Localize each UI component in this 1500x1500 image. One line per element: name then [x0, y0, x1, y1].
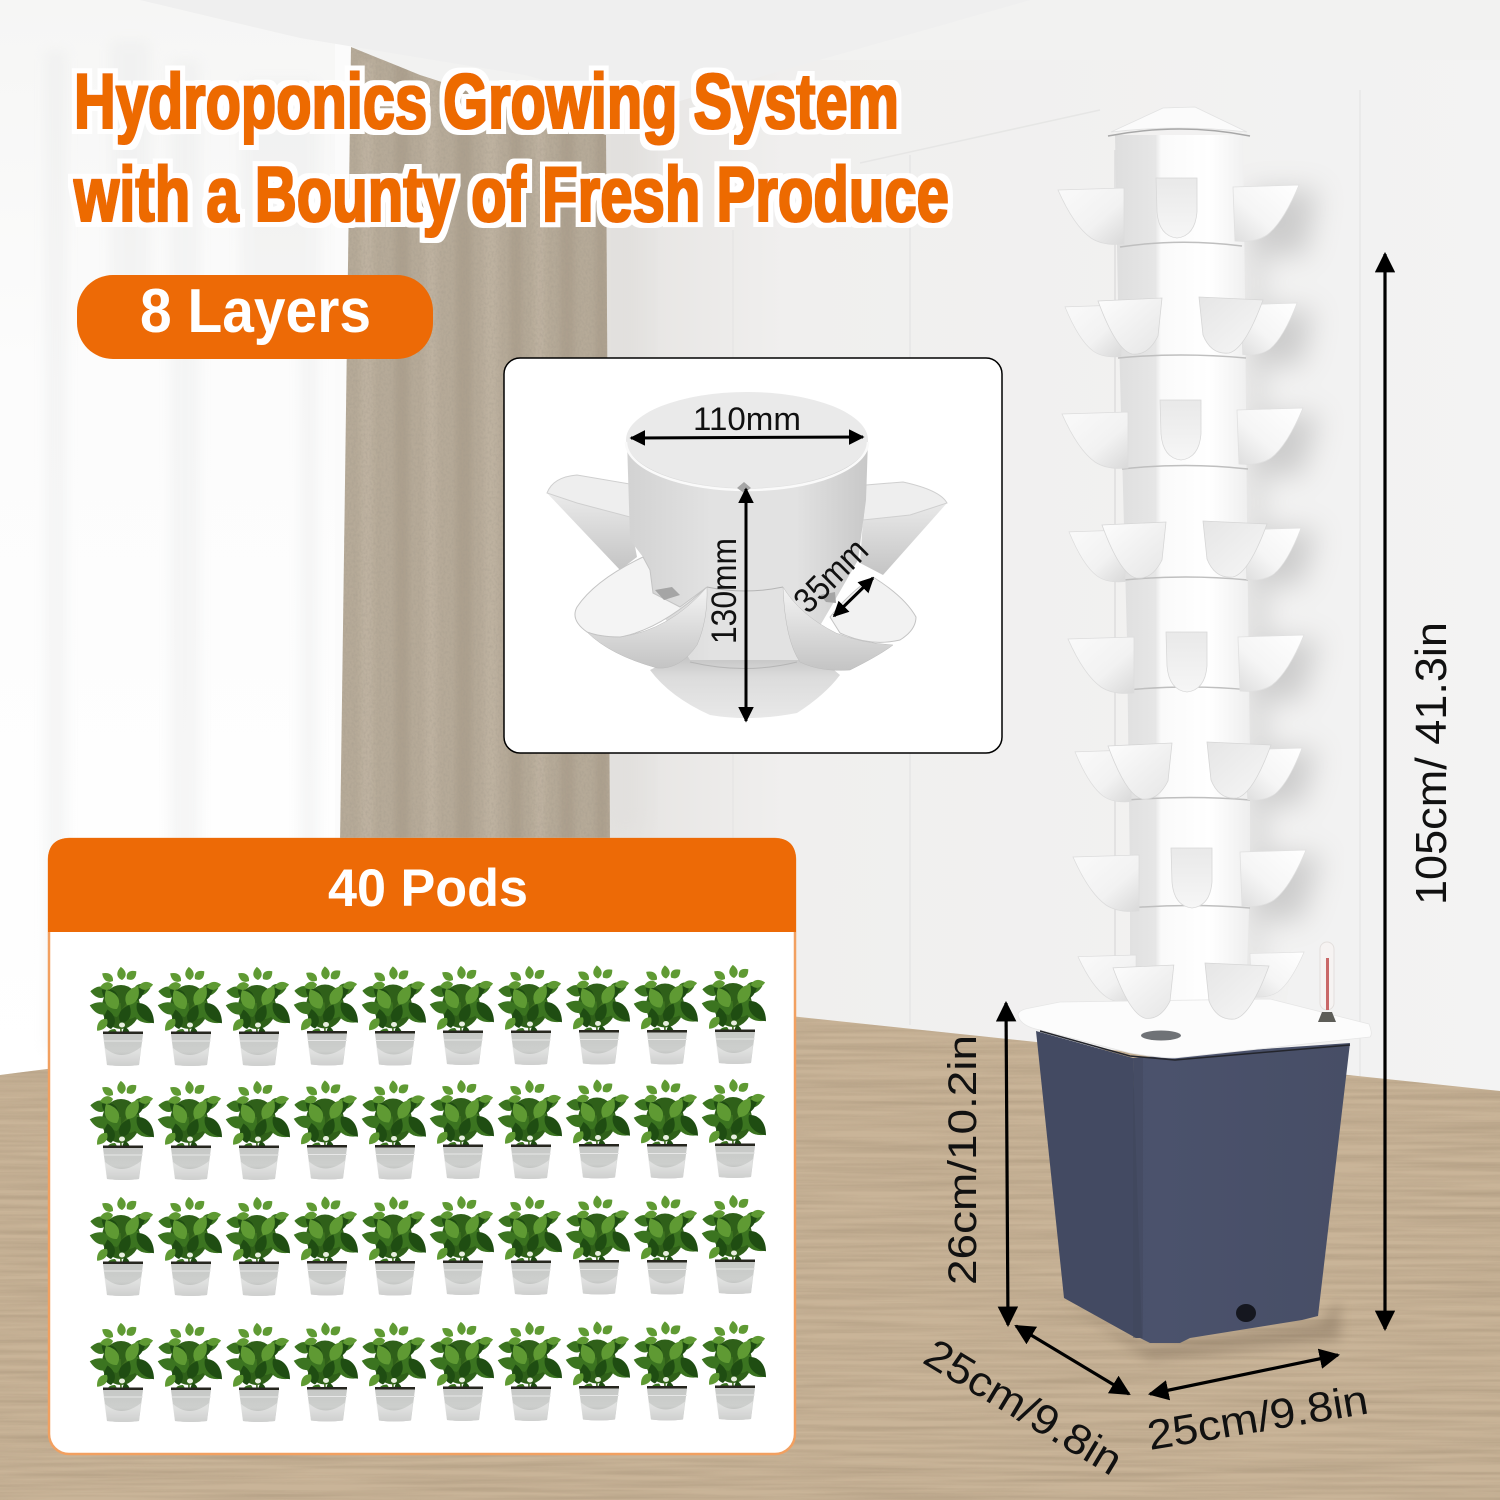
drain hole [1236, 1304, 1256, 1322]
layer 2 pods [1065, 297, 1297, 357]
tower: stacked planter column [1058, 107, 1306, 1003]
dimension: 130mm: 130mm [705, 538, 744, 644]
title: with a Bounty of Fresh Produce [73, 150, 949, 238]
window sheer curtain [0, 0, 353, 1090]
wood floor [0, 990, 1500, 1500]
layer 7 pods [1073, 848, 1306, 911]
thermometer [1318, 942, 1336, 1022]
title [73, 57, 949, 238]
tub right face [1133, 1043, 1350, 1343]
bottom dome [650, 650, 840, 718]
title: Hydroponics Growing System [74, 57, 899, 145]
reservoir base [1018, 942, 1371, 1360]
dimension: 110mm: 110mm [693, 401, 801, 437]
front left pod [575, 557, 707, 668]
layers badge [77, 275, 433, 359]
wall [606, 60, 1500, 1100]
back left pod [547, 475, 637, 570]
dimension: base width: 25cm/9.8in [1144, 1376, 1371, 1459]
dimension: overall height: 105cm/ 41.3in [1407, 622, 1456, 905]
layer 3 pods [1062, 400, 1303, 468]
panel: single layer dimensions [504, 358, 1002, 753]
column [1115, 135, 1250, 1000]
curtain [340, 40, 610, 850]
back right pod [860, 482, 947, 575]
dimension: base depth: 25cm/9.8in [916, 1329, 1131, 1484]
tower cap [1108, 107, 1250, 136]
layer 1 pods [1058, 178, 1299, 244]
panel heading: 40 Pods [328, 859, 528, 918]
layer 6 pods [1075, 742, 1302, 802]
panel: 40 pods [48, 838, 796, 1454]
plant grid [88, 964, 771, 1422]
front right pod [783, 577, 916, 670]
layers badge: 8 Layers [140, 277, 371, 346]
dimension: 35mm: 35mm [786, 531, 876, 621]
illustration: planter layer [547, 392, 947, 718]
tower shadow on wall [1250, 190, 1322, 1000]
ceiling [0, 0, 1030, 110]
panel header [48, 838, 796, 932]
layer 8 back pods [1078, 952, 1304, 1003]
layer 8 front pods [1113, 963, 1269, 1019]
layer 5 pods [1068, 632, 1304, 693]
lid [1018, 999, 1371, 1058]
dimension: base height: 26cm/10.2in [941, 1035, 985, 1285]
layer 4 pods [1069, 521, 1301, 582]
cylinder body [627, 440, 868, 660]
tub shadow [1062, 1298, 1340, 1360]
tub left face [1036, 1031, 1142, 1338]
